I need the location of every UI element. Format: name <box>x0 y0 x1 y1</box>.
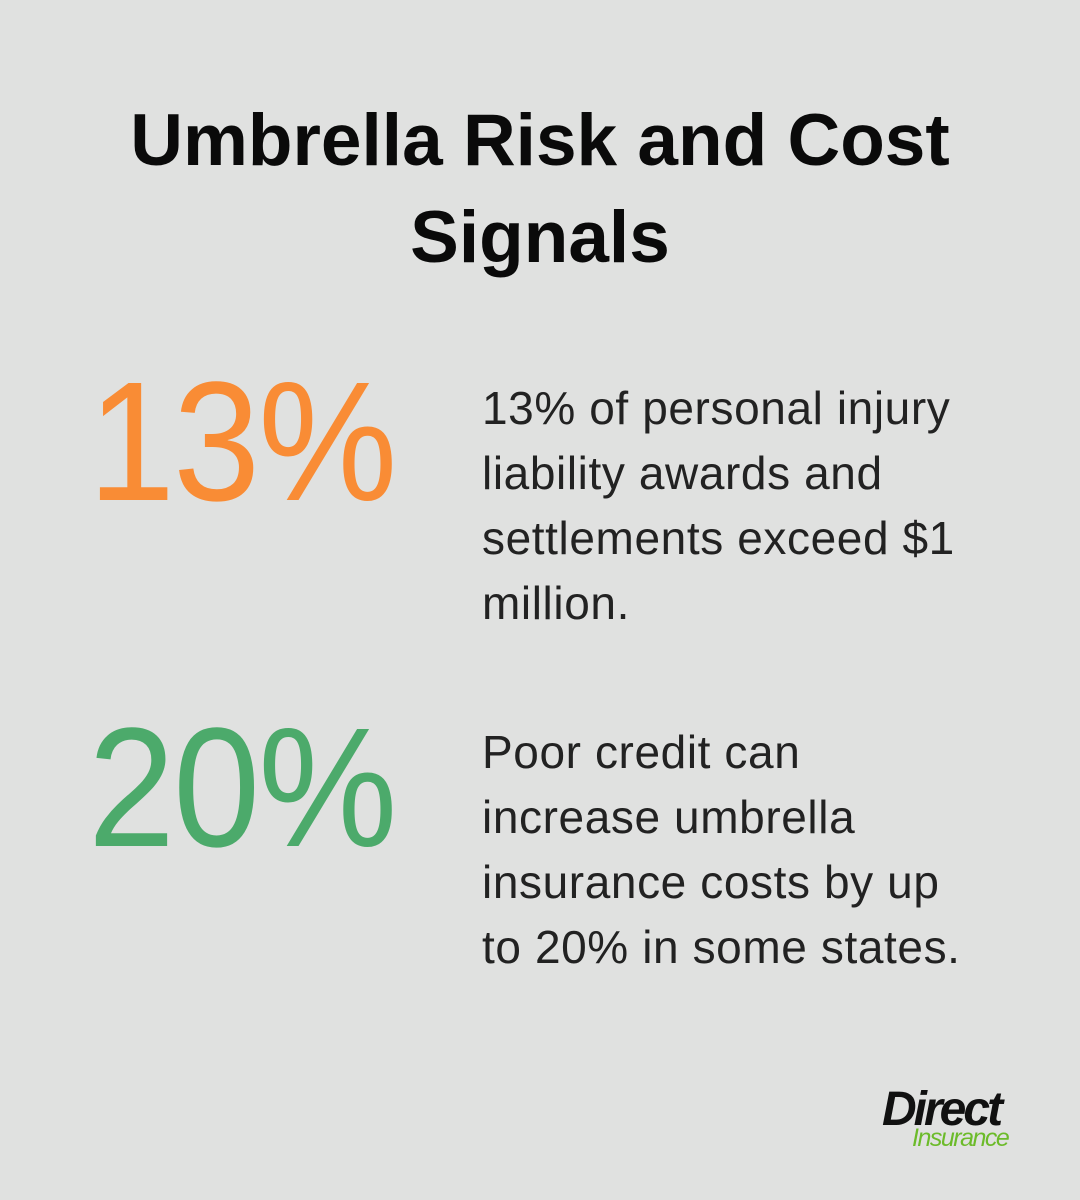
text: 20% description <box>482 726 961 973</box>
text: 13% description: liability awards and <box>482 447 883 499</box>
text: 20% description: to 20% in some states. <box>482 921 961 973</box>
text: 20% description: insurance costs by up <box>482 856 940 908</box>
title <box>130 100 950 278</box>
stat: 20%: 20% <box>88 693 396 883</box>
text: 13% description: million. <box>482 577 630 629</box>
title: Signals <box>410 197 670 278</box>
text: 13% description: settlements exceed $1 <box>482 512 955 564</box>
title: Umbrella Risk and Cost <box>130 100 950 181</box>
logo: Insurance <box>912 1124 1008 1152</box>
text: 13% description <box>482 382 955 629</box>
text: 20% description: increase umbrella <box>482 791 855 843</box>
stat: 13%: 13% <box>88 347 396 537</box>
text: 20% description: Poor credit can <box>482 726 800 778</box>
logo: Direct <box>882 1083 1000 1136</box>
text: 13% description: 13% of personal injury <box>482 382 950 434</box>
